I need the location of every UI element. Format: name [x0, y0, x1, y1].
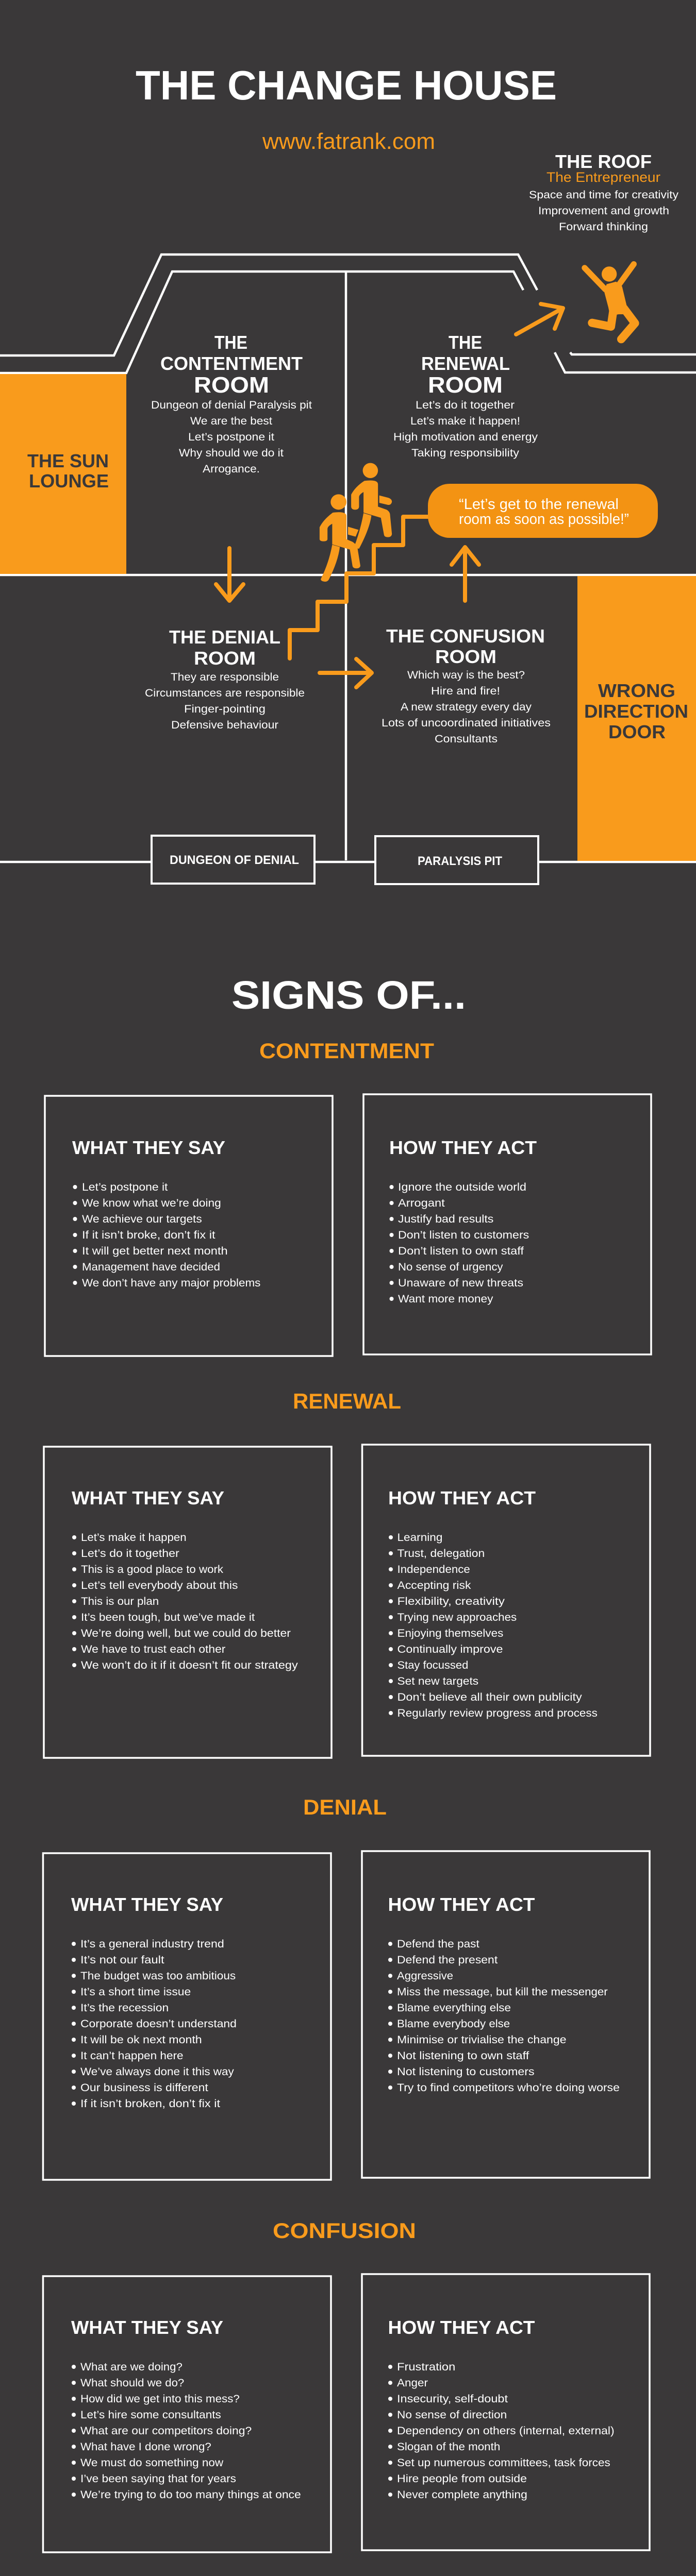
panel: contentment what they say: Management have decided [82, 1261, 220, 1273]
panel: contentment how they act: No sense of urgency [398, 1261, 503, 1273]
box: paralysis pit: PARALYSIS PIT [418, 854, 502, 868]
arrow: renewal to roof [516, 304, 563, 334]
speech bubble [428, 484, 658, 538]
panel: the sun lounge: THE SUN [27, 450, 109, 471]
panel: denial how they act: Aggressive [397, 1970, 453, 1982]
panel: wrong direction door: WRONG [598, 680, 675, 701]
panel: confusion what they say: WHAT THEY SAY [71, 2317, 223, 2338]
panel: renewal what they say: Let’s tell everybody about this [81, 1580, 238, 1591]
heading: RENEWAL [421, 353, 510, 374]
panel: the roof text [529, 151, 679, 233]
panel: confusion how they act: Hire people from outside [397, 2473, 527, 2485]
heading: ROOM [194, 648, 256, 669]
website link: www.fatrank.com [262, 129, 435, 154]
panel: contentment what they say: We know what we’re doing [82, 1197, 221, 1209]
panel: denial what they say: The budget was too ambitious [80, 1970, 236, 1982]
arrow: contentment to denial [216, 548, 243, 601]
heading [169, 626, 280, 669]
panel: renewal what they say: WHAT THEY SAY [72, 1487, 224, 1509]
panel: contentment how they act: Arrogant [398, 1197, 445, 1209]
heading: ROOM [435, 646, 496, 667]
description: Why should we do it [179, 447, 284, 459]
panel: confusion how they act: Insecurity, self-doubt [397, 2393, 508, 2405]
panel: confusion what they say [43, 2276, 331, 2552]
panel: renewal how they act: Set new targets [397, 1675, 478, 1687]
panel: the confusion room [382, 625, 551, 745]
panel: denial what they say: It can’t happen here [80, 2050, 184, 2062]
panel: confusion how they act: Slogan of the month [397, 2441, 500, 2453]
panel: renewal how they act: Don’t believe all their own publicity [397, 1691, 582, 1703]
heading: THE [214, 332, 247, 353]
heading: THE [449, 332, 482, 353]
panel: denial how they act: Blame everything else [397, 2002, 511, 2014]
panel: renewal how they act: Regularly review progress and process [397, 1707, 598, 1719]
panel: renewal how they act [362, 1445, 650, 1756]
panel: denial what they say: If it isn’t broken, don’t fix it [80, 2098, 220, 2110]
panel: confusion how they act: Never complete anything [397, 2489, 527, 2501]
panel: contentment what they say: WHAT THEY SAY [72, 1137, 225, 1158]
panel: renewal what they say: Let’s do it together [81, 1548, 179, 1560]
heading: ROOM [428, 372, 503, 398]
panel: denial how they act: Defend the present [397, 1954, 498, 1966]
panel: denial what they say: WHAT THEY SAY [71, 1894, 223, 1915]
heading: the roof: THE ROOF [555, 151, 652, 172]
heading: signs of: SIGNS OF... [231, 973, 466, 1018]
arrow: confusion to renewal [452, 547, 479, 601]
panel: renewal what they say [44, 1447, 332, 1758]
panel: confusion what they say: How did we get into this mess? [80, 2393, 240, 2405]
panel: contentment how they act: Unaware of new threats [398, 1277, 523, 1289]
description [145, 671, 305, 731]
panel: renewal how they act: Trying new approaches [397, 1612, 517, 1623]
panel: contentment what they say: If it isn’t broke, don’t fix it [82, 1229, 216, 1241]
description [151, 399, 312, 475]
section heading: confusion: CONFUSION [273, 2218, 416, 2243]
panel: denial how they act: Try to find competitors who’re doing worse [397, 2082, 620, 2094]
description [393, 399, 538, 459]
box: dungeon of denial [152, 836, 314, 884]
panel: confusion how they act: Anger [397, 2377, 428, 2389]
panel: wrong direction door: DIRECTION [584, 701, 688, 722]
panel: renewal how they act: Enjoying themselves [397, 1628, 503, 1639]
panel: denial what they say: Our business is different [80, 2082, 208, 2094]
heading [386, 625, 545, 667]
panel: wrong direction door: DOOR [608, 721, 666, 742]
subheading: the entrepreneur: The Entrepreneur [546, 170, 660, 185]
panel: contentment how they act: Don’t listen to customers [398, 1229, 529, 1241]
panel: confusion how they act [362, 2274, 650, 2550]
description: Circumstances are responsible [145, 687, 305, 699]
panel: contentment how they act: Don’t listen to own staff [398, 1245, 524, 1257]
panel: contentment what they say: It will get better next month [82, 1245, 228, 1257]
panel: renewal what they say: We won’t do it if it doesn’t fit our strategy [81, 1659, 298, 1671]
panel: contentment what they say: Let’s postpone it [82, 1181, 168, 1193]
panel: contentment what they say: We don’t have any major problems [82, 1277, 260, 1289]
description: Hire and fire! [431, 685, 500, 697]
icon: jumping person [585, 264, 635, 339]
description: A new strategy every day [401, 701, 532, 713]
heading: CONTENTMENT [160, 353, 303, 374]
description: Which way is the best? [407, 669, 525, 681]
roof description: Space and time for creativity [529, 189, 679, 201]
panel: contentment how they act: HOW THEY ACT [389, 1137, 537, 1158]
panel: confusion how they act: Dependency on others (internal, external) [397, 2425, 615, 2437]
heading [421, 332, 510, 398]
description: Lots of uncoordinated initiatives [382, 717, 551, 729]
panel: confusion what they say: What should we do? [80, 2377, 184, 2389]
panel: renewal how they act: HOW THEY ACT [388, 1487, 536, 1509]
icon: climbing people [320, 463, 392, 582]
box: paralysis pit [375, 836, 538, 884]
roof description [529, 189, 679, 233]
panel: the renewal room [393, 332, 538, 459]
arrow: denial to confusion [320, 659, 372, 687]
panel: renewal what they say: This is a good place to work [81, 1564, 224, 1575]
panel: confusion what they say: What are we doing? [80, 2361, 183, 2373]
panel: denial how they act: Miss the message, but kill the messenger [397, 1986, 608, 1998]
panel: renewal how they act: Learning [397, 1532, 442, 1544]
box: dungeon of denial: DUNGEON OF DENIAL [170, 853, 299, 867]
panel: contentment how they act [363, 1094, 651, 1354]
panel: renewal what they say: We’re doing well, but we could do better [81, 1628, 291, 1639]
roof description: Forward thinking [559, 221, 648, 233]
panel: denial how they act: HOW THEY ACT [388, 1894, 535, 1915]
section heading: denial: DENIAL [303, 1795, 387, 1819]
panel: denial how they act: Defend the past [397, 1938, 479, 1950]
panel: confusion how they act: Set up numerous committees, task forces [397, 2457, 610, 2469]
panel: confusion what they say: What are our competitors doing? [80, 2425, 252, 2437]
description [382, 669, 551, 745]
panel: renewal how they act: Flexibility, creativity [397, 1596, 505, 1607]
panel: confusion how they act: Frustration [397, 2361, 455, 2373]
description: Defensive behaviour [171, 719, 278, 731]
heading [160, 332, 303, 398]
panel: wrong direction door [577, 576, 696, 861]
panel: denial what they say: It will be ok next month [80, 2034, 202, 2046]
roof description: Improvement and growth [538, 205, 669, 217]
description: We are the best [190, 415, 272, 427]
panel: denial what they say [43, 1853, 331, 2180]
panel: contentment how they act: Ignore the outside world [398, 1181, 526, 1193]
panel: contentment how they act: Justify bad results [398, 1213, 493, 1225]
description: Finger-pointing [184, 703, 266, 715]
description: Let’s do it together [416, 399, 515, 411]
panel: confusion what they say: We’re trying to do too many things at once [80, 2489, 301, 2501]
panel: denial how they act [362, 1851, 650, 2178]
description: Let’s make it happen! [410, 415, 520, 427]
house outline [0, 255, 696, 862]
panel: renewal what they say: We have to trust each other [81, 1643, 225, 1655]
panel: denial what they say: Corporate doesn’t understand [80, 2018, 237, 2030]
panel: confusion what they say: What have I done wrong? [80, 2441, 211, 2453]
panel: contentment what they say: We achieve our targets [82, 1213, 202, 1225]
panel: confusion what they say: Let’s hire some consultants [80, 2409, 221, 2421]
panel: renewal what they say: Let’s make it happen [81, 1532, 187, 1544]
speech bubble: “Let’s get to the renewal [459, 496, 619, 513]
panel: the sun lounge [0, 374, 126, 574]
panel: denial what they say: It’s not our fault [80, 1954, 164, 1966]
section heading: renewal: RENEWAL [293, 1389, 401, 1413]
panel: denial what they say: It’s a short time issue [80, 1986, 191, 1998]
heading: THE CONFUSION [386, 625, 545, 647]
panel: renewal how they act: Independence [397, 1564, 470, 1575]
description: High motivation and energy [393, 431, 538, 443]
panel: contentment how they act: Want more money [398, 1293, 493, 1305]
panel: confusion what they say: We must do something now [80, 2457, 224, 2469]
description: Arrogance. [203, 463, 260, 475]
description: Let’s postpone it [188, 431, 274, 443]
panel: confusion how they act: HOW THEY ACT [388, 2317, 535, 2338]
panel: renewal how they act: Continually improve [397, 1643, 503, 1655]
panel: denial what they say: We’ve always done it this way [80, 2066, 234, 2078]
panel: denial what they say: It’s the recession [80, 2002, 169, 2014]
description: They are responsible [171, 671, 279, 683]
panel: denial how they act: Minimise or trivialise the change [397, 2034, 567, 2046]
panel: confusion what they say: I’ve been saying that for years [80, 2473, 236, 2485]
description: Consultants [435, 733, 498, 745]
panel: denial how they act: Blame everybody else [397, 2018, 510, 2030]
panel: the sun lounge: LOUNGE [29, 470, 109, 492]
icon: staircase [290, 517, 429, 658]
panel: renewal what they say: This is our plan [81, 1596, 159, 1607]
speech bubble: room as soon as possible!” [459, 511, 629, 528]
title: THE CHANGE HOUSE [136, 62, 557, 108]
heading: THE DENIAL [169, 626, 280, 648]
panel: renewal what they say: It’s been tough, but we’ve made it [81, 1612, 255, 1623]
panel: renewal how they act: Accepting risk [397, 1580, 471, 1591]
panel: the contentment room [151, 332, 312, 475]
panel: confusion how they act: No sense of direction [397, 2409, 507, 2421]
panel: denial what they say: It’s a general industry trend [80, 1938, 224, 1950]
panel: denial how they act: Not listening to customers [397, 2066, 535, 2078]
panel: contentment what they say [45, 1096, 333, 1356]
section heading: contentment: CONTENTMENT [259, 1039, 434, 1063]
panel: denial how they act: Not listening to own staff [397, 2050, 529, 2062]
panel: renewal how they act: Trust, delegation [397, 1548, 485, 1560]
panel: renewal how they act: Stay focussed [397, 1659, 468, 1671]
description: Dungeon of denial Paralysis pit [151, 399, 312, 411]
panel: the denial room [145, 626, 305, 731]
description: Taking responsibility [411, 447, 520, 459]
heading: ROOM [194, 372, 269, 398]
